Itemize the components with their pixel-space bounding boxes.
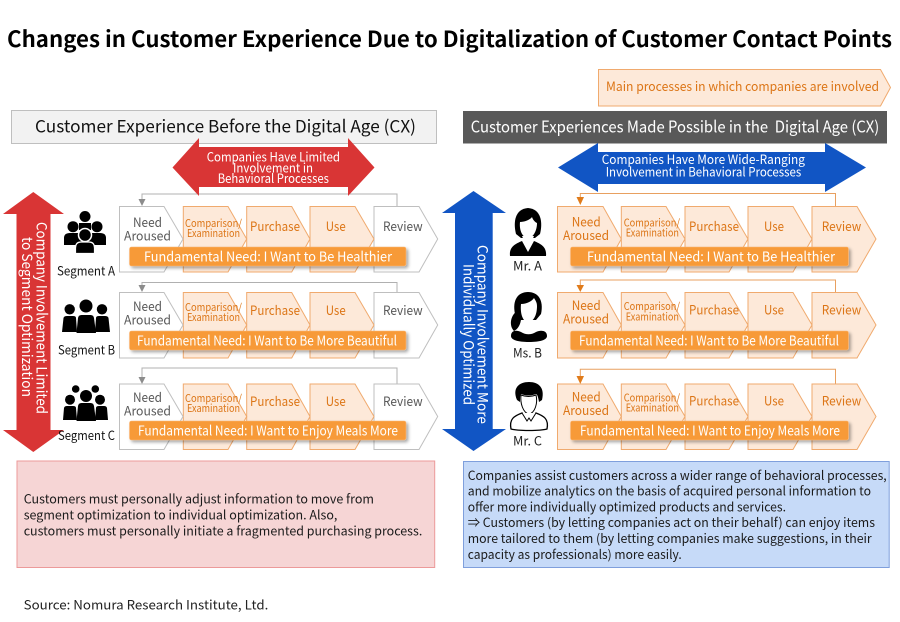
heading: in the digital age: Customer Experiences Made Possible in the Digital Age (CX) <box>471 114 879 138</box>
label: segment C: Segment C <box>58 425 115 444</box>
row: Ms. B process: Use <box>764 299 784 318</box>
label: segment B: Segment B <box>58 340 115 359</box>
arrow: red vertical segment optimization <box>3 192 64 452</box>
arrow: red limited involvement: Involvement in <box>233 157 313 176</box>
row: Mr. A process <box>558 194 876 272</box>
source note: Source: Nomura Research Institute, Ltd. <box>24 594 268 613</box>
arrow: blue vertical individually optimized: Individually Optimized <box>458 264 480 405</box>
label: Mr. C: Mr. C <box>513 431 542 450</box>
arrow: red vertical segment optimization: Company Involvement Limited <box>32 222 52 414</box>
row: segment A process <box>120 194 438 272</box>
row: segment B process: Need <box>133 296 162 315</box>
row: segment B process: Examination <box>187 310 240 325</box>
row: Mr. C process: Use <box>764 391 784 410</box>
row: segment B process: Aroused <box>124 310 171 329</box>
panel: before digital age summary: Customers must personally adjust information to move from <box>24 488 374 507</box>
row: segment A process: Examination <box>187 226 240 241</box>
row: segment B process: Purchase <box>250 300 300 319</box>
row: Ms. B process: Fundamental Need: I Want to Be More Beautiful <box>579 330 839 350</box>
row: Mr. A process: Review <box>822 216 862 235</box>
row: segment A process: Aroused <box>124 226 171 245</box>
row: segment C process <box>120 368 438 450</box>
icon: segment C group <box>63 385 108 421</box>
arrow: red vertical segment optimization: to Segment Optimization <box>17 237 38 397</box>
row: Mr. A process: Examination <box>626 226 679 241</box>
panel: before digital age summary: segment optimization to individual optimization. Also, <box>24 504 337 523</box>
row: segment A process: Fundamental Need: I Want to Be Healthier <box>144 246 393 266</box>
row: Ms. B process: Need <box>572 295 601 314</box>
row: Mr. A process: Comparison/ <box>624 216 680 231</box>
row: segment C process: Fundamental Need: I Want to Enjoy Meals More <box>138 420 398 440</box>
row: Mr. A process: Need <box>572 212 601 231</box>
row: Mr. C process <box>558 369 876 450</box>
row: segment C process: Use <box>326 391 346 410</box>
panel: digital age summary: offer more individually optimized products and services. <box>468 496 786 515</box>
row: Mr. C process: Comparison/ <box>624 391 680 406</box>
row: segment B process: Fundamental Need: I Want to Be More Beautiful <box>137 330 397 350</box>
label: Ms. B: Ms. B <box>513 343 542 362</box>
row: segment C process: Purchase <box>250 391 300 410</box>
panel: before digital age summary <box>17 461 435 568</box>
icon: segment A group <box>64 211 106 254</box>
heading: before the digital age: Customer Experience Before the Digital Age (CX) <box>35 113 416 138</box>
row: segment C process: Examination <box>187 401 240 416</box>
icon: segment B group <box>62 300 110 333</box>
row: Ms. B process <box>558 280 876 358</box>
row: segment C process: Need <box>133 387 162 406</box>
legend: main processes: Main processes in which companies are involved <box>606 76 879 95</box>
row: segment C process: Review <box>383 391 423 410</box>
arrow: blue wide-ranging involvement: Involvement in Behavioral Processes <box>606 162 801 181</box>
arrow: blue vertical individually optimized: Company Involvement More <box>472 245 494 424</box>
row: Mr. C process: Fundamental Need: I Want to Enjoy Meals More <box>580 420 840 440</box>
arrow: red limited involvement: Behavioral Processes <box>218 168 329 187</box>
arrow: blue vertical individually optimized <box>442 191 506 451</box>
title: Changes in Customer Experience Due to Digitalization of Customer Contact Points <box>7 22 892 54</box>
row: Mr. A process: Aroused <box>563 225 609 244</box>
panel: right process rows <box>558 194 876 450</box>
panel: digital age summary: capacity as professionals) more easily. <box>468 544 682 563</box>
panel: digital age summary: Companies assist customers across a wider range of behavioral processes, <box>468 465 887 484</box>
panel: digital age summary: ⇒ Customers (by letting companies act on their behalf) can enjoy items <box>468 512 875 531</box>
row: segment C process: Aroused <box>124 401 171 420</box>
label: segment A: Segment A <box>57 261 115 280</box>
panel: digital age summary: more tailored to them (by letting companies make suggestions, in their <box>468 528 872 547</box>
row: segment A process: Use <box>326 216 346 235</box>
row: Ms. B process: Purchase <box>689 299 739 318</box>
row: segment B process <box>120 282 438 358</box>
row: Mr. C process: Examination <box>626 401 679 416</box>
row: Mr. A process: Purchase <box>689 216 739 235</box>
row: Mr. C process: Need <box>572 387 601 406</box>
panel: left process rows <box>120 194 438 450</box>
row: segment A process: Need <box>133 212 162 231</box>
panel: before digital age summary: customers must personally initiate a fragmented purchasing process. <box>24 520 422 539</box>
panel: digital age summary <box>464 462 889 568</box>
icon: Ms. B person <box>511 292 547 342</box>
row: Mr. C process: Review <box>822 391 862 410</box>
row: segment A process: Review <box>383 216 423 235</box>
row: segment B process: Use <box>326 300 346 319</box>
row: Mr. C process: Purchase <box>689 391 739 410</box>
row: Ms. B process: Examination <box>626 310 679 324</box>
arrow: blue wide-ranging involvement: Companies Have More Wide-Ranging <box>602 149 805 168</box>
row: Ms. B process: Review <box>822 299 862 318</box>
row: Ms. B process: Comparison/ <box>624 299 680 314</box>
row: segment A process: Comparison/ <box>185 216 242 231</box>
arrow: red limited involvement: Companies Have Limited <box>207 147 340 166</box>
row: Mr. A process: Use <box>764 216 784 235</box>
row: segment B process: Review <box>383 300 423 319</box>
row: Mr. C process: Aroused <box>563 400 609 419</box>
arrow: blue wide-ranging involvement <box>558 143 866 192</box>
arrow: red limited involvement <box>172 138 374 196</box>
row: Mr. A process: Fundamental Need: I Want to Be Healthier <box>587 246 836 266</box>
row: segment B process: Comparison/ <box>185 300 242 315</box>
legend: main processes <box>598 70 890 106</box>
panel: digital age summary: and mobilize analytics on the basis of acquired personal information to <box>468 481 871 500</box>
row: segment C process: Comparison/ <box>185 391 242 406</box>
heading: before the digital age <box>12 110 436 144</box>
row: segment A process: Purchase <box>250 216 300 235</box>
icon: Mr. A person <box>510 208 546 256</box>
row: Ms. B process: Aroused <box>563 309 609 328</box>
icon: Mr. C person <box>511 382 547 430</box>
label: Mr. A: Mr. A <box>513 256 542 275</box>
